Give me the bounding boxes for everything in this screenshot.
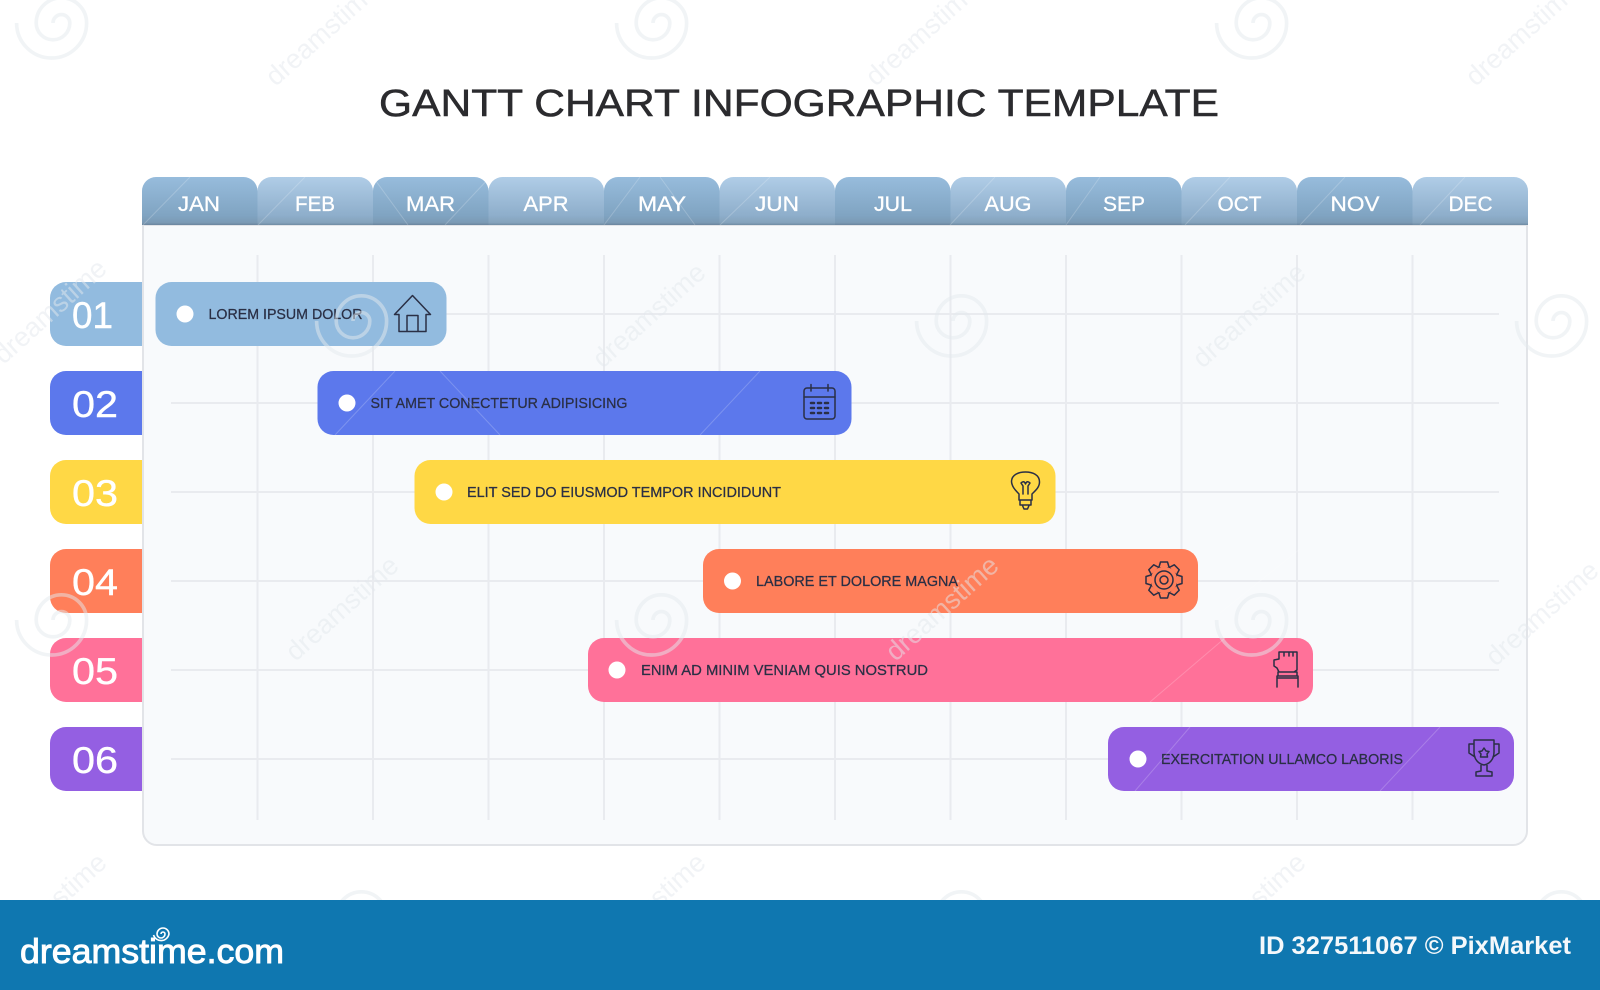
task bar 05: ENIM AD MINIM VENIAM QUIS NOSTRUD: [641, 663, 928, 679]
icon: swirl: [154, 928, 169, 941]
tab: APR: [488, 177, 604, 225]
watermark: dreamstime: [587, 257, 711, 374]
icon: gear: [1146, 562, 1182, 598]
tab: DEC: [1412, 177, 1528, 225]
task bar 03: [414, 460, 1056, 524]
row number 02: 02: [72, 384, 118, 425]
row number 04: [50, 549, 142, 613]
task bar 04: [703, 549, 1198, 613]
tab: MAR: MAR: [406, 193, 455, 216]
title: GANTT CHART INFOGRAPHIC TEMPLATE: [379, 83, 1219, 125]
tab: JUN: [720, 177, 835, 225]
tab: FEB: FEB: [295, 193, 335, 216]
tab: MAR: [373, 177, 488, 225]
row number 06: [50, 727, 142, 791]
tab: AUG: AUG: [984, 193, 1032, 216]
tab: NOV: NOV: [1330, 193, 1380, 216]
task bar 04: LABORE ET DOLORE MAGNA: [756, 574, 958, 590]
task bar 01: LOREM IPSUM DOLOR: [208, 307, 362, 323]
tab: JUL: [835, 177, 950, 225]
icon: calendar: [804, 384, 835, 419]
row number 02: [50, 371, 142, 435]
tab: OCT: [1182, 177, 1297, 225]
tab: AUG: [950, 177, 1066, 225]
tab: SEP: [1066, 177, 1182, 225]
task bar 06: EXERCITATION ULLAMCO LABORIS: [1161, 752, 1403, 768]
row number 05: 05: [72, 651, 118, 692]
tab: SEP: SEP: [1103, 193, 1145, 216]
tab: OCT: OCT: [1218, 193, 1262, 216]
image id and credit: ID 327511067 © PixMarket: [1259, 932, 1572, 960]
task bar 03: ELIT SED DO EIUSMOD TEMPOR INCIDIDUNT: [467, 485, 781, 501]
tab: NOV: [1297, 177, 1412, 225]
watermark: dreamstime: [280, 550, 404, 667]
icon: trophy: [1469, 740, 1499, 776]
chart grid: [171, 255, 1499, 820]
row number 05: [50, 638, 142, 702]
tab: JAN: [142, 177, 258, 225]
row number 04: 04: [72, 562, 118, 603]
footer logo: dreamstime.com: [20, 933, 284, 971]
row number 03: [50, 460, 142, 524]
tab: JUN: JUN: [755, 193, 799, 216]
panel: chart body: [143, 225, 1527, 845]
watermark: dreamstime: [1187, 847, 1311, 964]
watermark: dreamstime: [1187, 257, 1311, 374]
watermark: dreamstime: [587, 847, 711, 964]
tab: APR: APR: [524, 193, 568, 216]
row number 01: 01: [72, 295, 113, 336]
icon: house: [394, 296, 430, 332]
row number 03: 03: [72, 473, 118, 514]
tab: JAN: JAN: [178, 193, 220, 216]
row number 06: 06: [72, 740, 118, 781]
task bar 06: [1108, 727, 1514, 791]
task bar 05: [588, 638, 1313, 702]
month header row: [142, 177, 1528, 225]
tab: JUL: JUL: [874, 193, 912, 216]
tab: MAY: [604, 177, 720, 225]
watermark: dreamstime: [880, 550, 1004, 667]
task bar 02: [318, 371, 852, 435]
tab: MAY: MAY: [638, 193, 686, 216]
footer band: [0, 900, 1600, 990]
task bar 02: SIT AMET CONECTETUR ADIPISICING: [370, 396, 628, 412]
row number 01: [50, 282, 142, 346]
task bar 01: [156, 282, 446, 346]
tab: FEB: [258, 177, 373, 225]
icon: raised fist: [1274, 652, 1298, 687]
icon: light bulb: [1012, 472, 1040, 509]
tab: DEC: DEC: [1448, 193, 1492, 216]
